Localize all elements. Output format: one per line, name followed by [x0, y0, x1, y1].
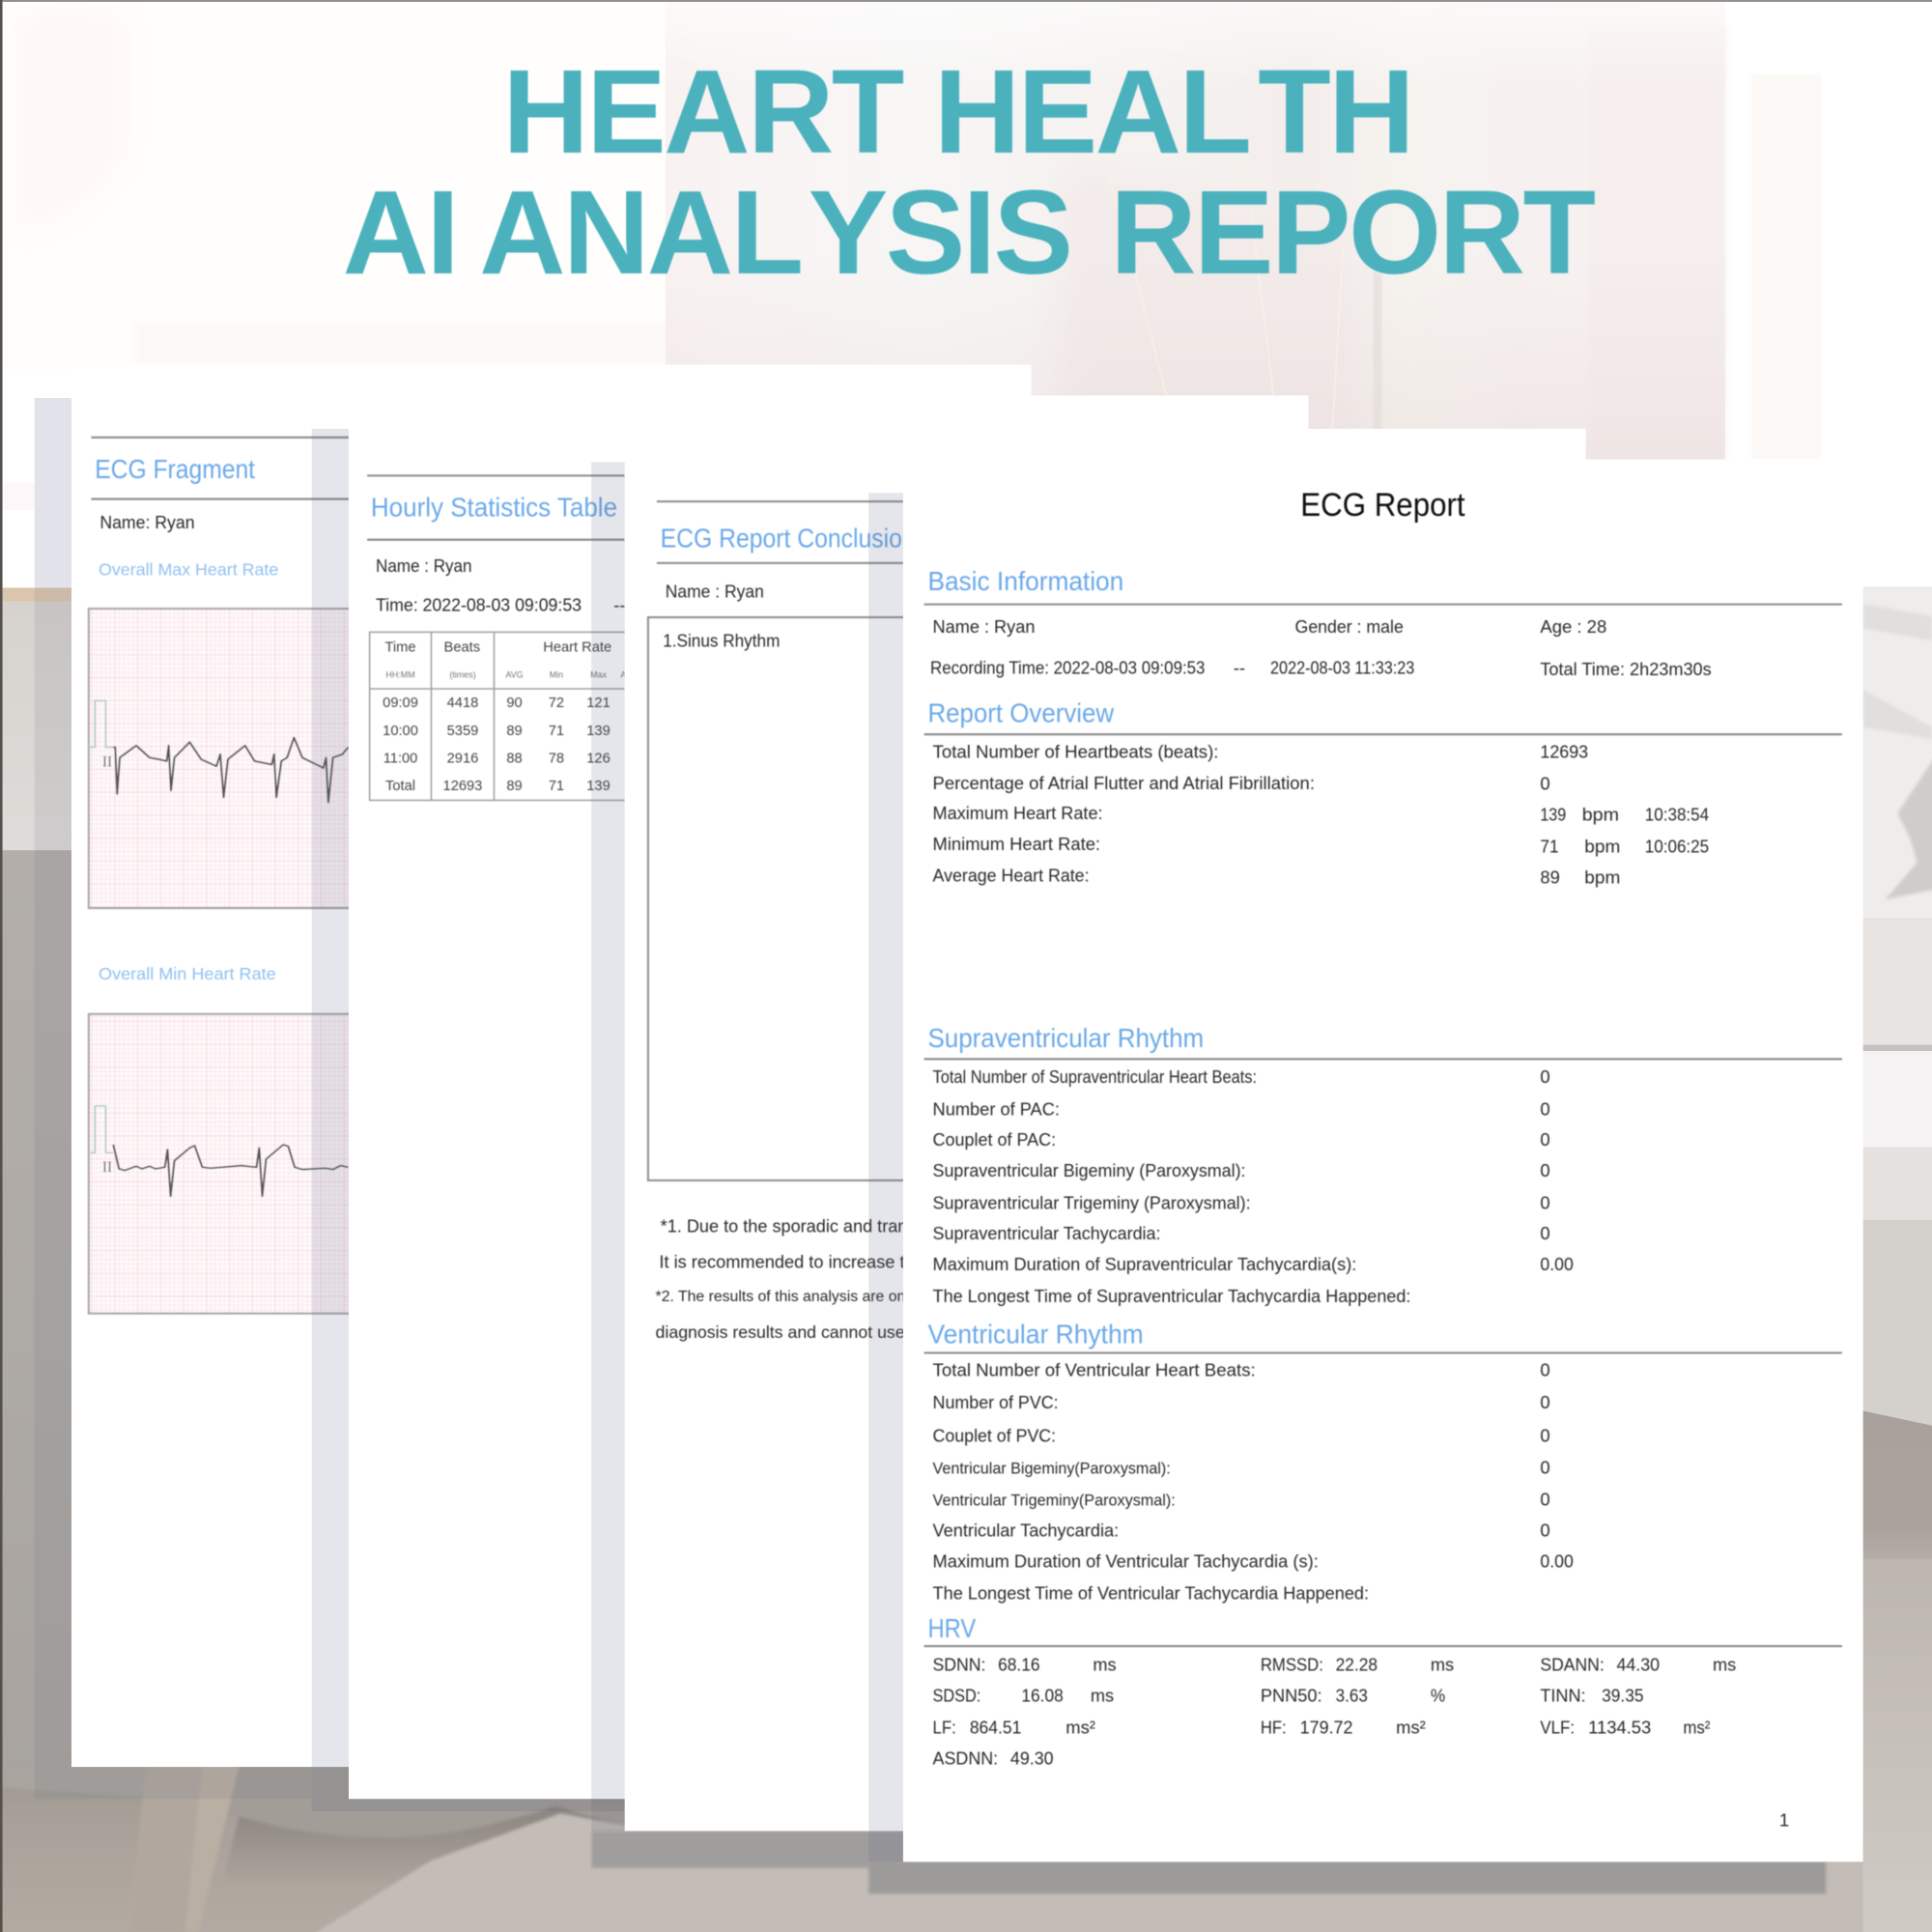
section: Basic Information: [924, 566, 1842, 679]
section: HRV: 3.63: [1336, 1685, 1368, 1705]
row total: 89: [506, 779, 523, 794]
row 11:00: 11:00: [384, 752, 417, 767]
section: Ventricular Rhythm: Total Number of Ventricular Heart Beats:: [933, 1360, 1256, 1380]
section: Ventricular Rhythm: Maximum Duration of Ventricular Tachycardia (s):: [933, 1550, 1319, 1571]
row 10:00: 5359: [447, 724, 478, 739]
section: Report Overview: bpm: [1582, 804, 1619, 824]
row 09:09: 121: [586, 696, 611, 711]
row 11:00: 88: [506, 752, 523, 767]
section: Ventricular Rhythm: Ventricular Tachycardia:: [933, 1520, 1119, 1541]
heading: ECG Report Conclusion: ECG Report Conclusion: [661, 523, 916, 553]
page 2: Hourly Statistics Table: --: [613, 595, 626, 615]
row 11:00: 2916: [447, 752, 478, 767]
section: Report Overview: Total Number of Heartbeats (beats):: [933, 741, 1218, 761]
row 10:00: 139: [586, 724, 611, 739]
section: Supraventricular Rhythm: The Longest Time of Supraventricular Tachycardia Happened:: [933, 1286, 1410, 1306]
section: HRV: ms: [1713, 1655, 1736, 1675]
section: Report Overview: Percentage of Atrial Flutter and Atrial Fibrillation:: [933, 773, 1315, 793]
section: Basic Information: Total Time: 2h23m30s: [1540, 659, 1712, 679]
chart: ECG strip at min heart rate: II: [102, 1159, 112, 1176]
section: Supraventricular Rhythm: Supraventricular Rhythm: [927, 1023, 1204, 1053]
footnotes: *1. Due to the sporadic and transient: [661, 1217, 945, 1236]
section: HRV: HF:: [1261, 1718, 1287, 1738]
title: [343, 45, 1595, 299]
shadow of page 1: [35, 398, 312, 1799]
row 09:09: 09:09: [383, 696, 418, 711]
row 10:00: 10:00: [383, 724, 418, 739]
section: Ventricular Rhythm: 0: [1540, 1392, 1550, 1412]
subheading: max heart rate: Overall Max Heart Rate: [99, 560, 278, 580]
footnotes: diagnosis results and cannot use: [656, 1322, 905, 1342]
section: HRV: ms: [1431, 1655, 1454, 1675]
table: hourly statistics: Time: [385, 640, 416, 656]
page 1: ECG Fragment: [71, 365, 1032, 1767]
title: HEAL: [934, 45, 1249, 179]
conclusion box: 1.Sinus Rhythm: [663, 631, 780, 651]
title: YSIS: [809, 166, 1070, 299]
section: HRV: HRV: [927, 1613, 976, 1643]
section: HRV: 49.30: [1010, 1748, 1054, 1769]
page number: 1: [1779, 1809, 1789, 1830]
footnotes: It is recommended to increase the: [659, 1251, 924, 1271]
heading: Hourly Statistics Table: Hourly Statistics Table: [371, 492, 617, 522]
section: HRV: 68.16: [998, 1655, 1040, 1675]
name line: Name : Ryan: [376, 555, 472, 576]
subheading: min heart rate: Overall Min Heart Rate: [99, 964, 276, 983]
section: Ventricular Rhythm: 0: [1540, 1520, 1550, 1541]
chart: ECG strip at max heart rate: II: [102, 753, 112, 770]
section: HRV: ms: [1091, 1685, 1114, 1705]
section: HRV: 44.30: [1616, 1655, 1660, 1675]
section: HRV: ASDNN:: [933, 1748, 998, 1769]
chart: ECG strip at max heart rate: [87, 607, 349, 910]
table: hourly statistics: Min: [550, 670, 563, 680]
section: Supraventricular Rhythm: Maximum Duration of Supraventricular Tachycardia(s):: [933, 1254, 1356, 1274]
report title: ECG Report: [1300, 487, 1465, 524]
section: Basic Information: Name : Ryan: [933, 616, 1035, 637]
section: HRV: TINN:: [1540, 1685, 1586, 1705]
row 10:00: 71: [549, 724, 564, 739]
section: Ventricular Rhythm: Ventricular Rhythm: [927, 1319, 1144, 1349]
section: Basic Information: --: [1234, 657, 1245, 677]
section: HRV: ms²: [1065, 1718, 1095, 1738]
section: Supraventricular Rhythm: Supraventricular Tachycardia:: [933, 1223, 1161, 1243]
section: HRV: 16.08: [1021, 1685, 1064, 1705]
title: TH: [1258, 45, 1412, 179]
heading: ECG Fragment: ECG Fragment: [95, 454, 255, 484]
section: Supraventricular Rhythm: 0: [1540, 1066, 1550, 1087]
section: HRV: ms²: [1396, 1718, 1426, 1738]
table: hourly statistics: Beats: [444, 640, 480, 656]
section: Report Overview: 10:38:54: [1645, 804, 1709, 824]
chart: ECG strip at min heart rate: [87, 1012, 349, 1316]
section: Report Overview: Report Overview: [927, 697, 1115, 727]
section: Report Overview: bpm: [1584, 867, 1620, 888]
title: AI: [343, 166, 457, 299]
section: Supraventricular Rhythm: Couplet of PAC:: [933, 1129, 1056, 1150]
section: Supraventricular Rhythm: Supraventricular Bigeminy (Paroxysmal):: [933, 1160, 1246, 1180]
row total: 139: [586, 779, 611, 794]
table: hourly statistics: Max: [590, 670, 607, 680]
section: HRV: LF:: [933, 1718, 956, 1738]
footnotes: *2. The results of this analysis are only: [656, 1289, 917, 1305]
section: Supraventricular Rhythm: [924, 1023, 1842, 1306]
section: HRV: SDNN:: [933, 1655, 985, 1675]
row total: Total: [385, 779, 415, 794]
section: HRV: RMSSD:: [1261, 1655, 1323, 1675]
row 11:00: 126: [586, 752, 611, 767]
section: Supraventricular Rhythm: 0: [1540, 1192, 1550, 1212]
table: hourly statistics: A: [620, 670, 626, 680]
section: Report Overview: [924, 697, 1842, 888]
table: hourly statistics: (times): [449, 670, 476, 680]
section: Ventricular Rhythm: 0: [1540, 1458, 1550, 1478]
section: Report Overview: 71: [1540, 836, 1559, 856]
table: hourly statistics: AVG: [505, 670, 524, 680]
section: Supraventricular Rhythm: 0: [1540, 1223, 1550, 1243]
row total: [384, 779, 611, 791]
conclusion box: [646, 615, 903, 1182]
section: HRV: 1134.53: [1588, 1718, 1651, 1738]
name line: Name : Ryan: [666, 582, 764, 602]
section: Ventricular Rhythm: 0: [1540, 1360, 1550, 1380]
section: Basic Information: 2022-08-03 11:33:23: [1270, 657, 1414, 677]
table: hourly statistics: Heart Rate: [543, 640, 611, 656]
section: Supraventricular Rhythm: 0: [1540, 1160, 1550, 1180]
page 4: ECG Report: [903, 460, 1863, 1861]
title: REPORT: [1110, 166, 1595, 299]
section: Report Overview: 89: [1540, 867, 1560, 888]
time line: Time: 2022-08-03 09:09:53: [376, 595, 582, 615]
row total: 71: [549, 779, 564, 794]
section: Report Overview: 10:06:25: [1645, 836, 1709, 856]
section: Basic Information: Gender : male: [1295, 616, 1404, 637]
section: Supraventricular Rhythm: 0: [1540, 1129, 1550, 1150]
section: HRV: %: [1431, 1685, 1445, 1705]
section: Supraventricular Rhythm: Number of PAC:: [933, 1098, 1060, 1119]
section: Report Overview: 12693: [1540, 741, 1588, 761]
section: Ventricular Rhythm: Ventricular Bigeminy(Paroxysmal):: [933, 1460, 1171, 1478]
section: HRV: [924, 1613, 1842, 1769]
section: Report Overview: Maximum Heart Rate:: [933, 803, 1103, 823]
row total: 12693: [443, 779, 482, 794]
section: Ventricular Rhythm: [924, 1319, 1842, 1604]
section: Basic Information: Recording Time: 2022-08-03 09:09:53: [930, 657, 1205, 677]
section: HRV: 22.28: [1336, 1655, 1378, 1675]
section: HRV: VLF:: [1540, 1718, 1575, 1738]
section: HRV: SDSD:: [933, 1685, 980, 1705]
section: HRV: 864.51: [970, 1718, 1021, 1738]
section: Supraventricular Rhythm: Total Number of Supraventricular Heart Beats:: [933, 1066, 1257, 1087]
row 09:09: [383, 696, 611, 708]
section: Report Overview: Average Heart Rate:: [933, 866, 1090, 886]
section: HRV: 179.72: [1300, 1718, 1353, 1738]
section: Ventricular Rhythm: 0: [1540, 1490, 1550, 1510]
page 2: Hourly Statistics Table: [349, 395, 1309, 1799]
section: Report Overview: 139: [1540, 804, 1566, 824]
section: Supraventricular Rhythm: Supraventricular Trigeminy (Paroxysmal):: [933, 1192, 1251, 1212]
section: Report Overview: bpm: [1584, 836, 1620, 856]
name line: Name: Ryan: [99, 512, 195, 532]
row 10:00: 89: [506, 724, 523, 739]
section: Supraventricular Rhythm: 0.00: [1540, 1254, 1574, 1274]
table: hourly statistics: HH:MM: [385, 670, 415, 680]
section: HRV: PNN50:: [1261, 1685, 1322, 1705]
shadow of page 3: [591, 462, 1551, 1831]
section: Ventricular Rhythm: Ventricular Trigeminy(Paroxysmal):: [933, 1492, 1176, 1510]
section: Ventricular Rhythm: 0: [1540, 1425, 1550, 1445]
section: Basic Information: Basic Information: [927, 566, 1123, 596]
section: Report Overview: 0: [1540, 774, 1550, 794]
row 09:09: 90: [506, 696, 523, 711]
section: Report Overview: Minimum Heart Rate:: [933, 834, 1100, 854]
section: HRV: ms: [1093, 1655, 1117, 1675]
section: Ventricular Rhythm: Number of PVC:: [933, 1392, 1059, 1412]
row 11:00: [384, 752, 611, 763]
table: hourly statistics: [368, 631, 625, 802]
row 10:00: [383, 724, 611, 736]
section: HRV: ms²: [1683, 1718, 1710, 1738]
section: Ventricular Rhythm: 0.00: [1540, 1550, 1574, 1571]
title: HEART: [502, 45, 902, 179]
footnotes: [655, 1218, 903, 1343]
section: Ventricular Rhythm: Couplet of PVC:: [933, 1425, 1056, 1445]
row 11:00: 78: [549, 752, 564, 767]
page 3: ECG Report Conclusion: [625, 429, 1586, 1831]
row 09:09: 4418: [447, 696, 478, 711]
section: HRV: 39.35: [1602, 1685, 1644, 1705]
shadow of page 2: [312, 429, 1271, 1811]
section: Ventricular Rhythm: The Longest Time of Ventricular Tachycardia Happened:: [933, 1583, 1369, 1604]
row 09:09: 72: [549, 696, 564, 711]
shadow of page 4: [868, 493, 1826, 1861]
section: Basic Information: Age : 28: [1540, 616, 1606, 637]
section: HRV: SDANN:: [1540, 1655, 1605, 1675]
title: ANAL: [479, 166, 802, 299]
section: Supraventricular Rhythm: 0: [1540, 1098, 1550, 1119]
